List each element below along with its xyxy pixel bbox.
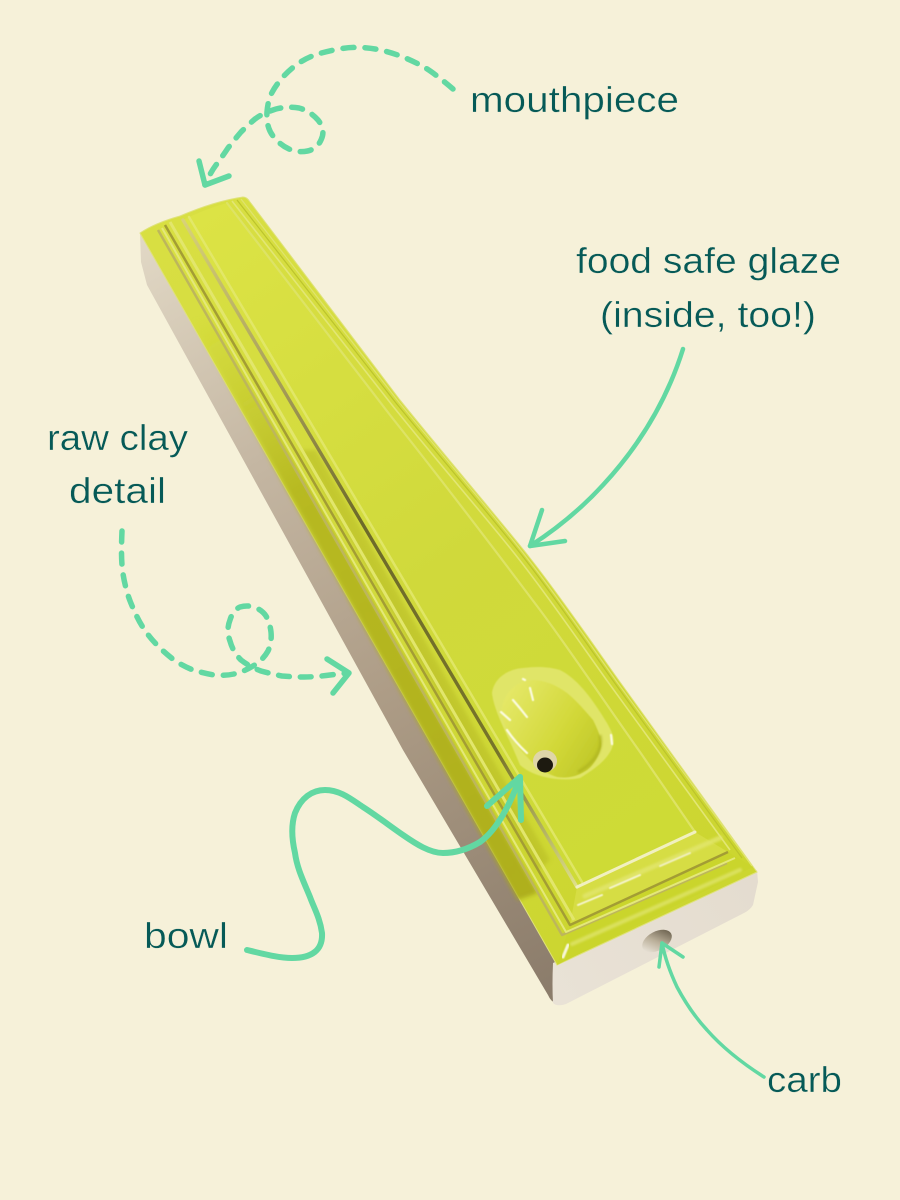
bowl rim bbox=[492, 667, 614, 779]
right ridge lines bbox=[232, 199, 752, 866]
arrow: food safe glaze bbox=[530, 349, 683, 546]
label: bowl: bowl bbox=[144, 915, 228, 956]
label: detail: detail bbox=[69, 470, 166, 511]
arrow: raw clay detail bbox=[122, 531, 349, 693]
bowl shadow bbox=[578, 735, 601, 772]
label: food safe glaze: food safe glaze bbox=[576, 240, 841, 281]
lower step highlights bbox=[563, 838, 740, 957]
raw clay front face bbox=[552, 870, 758, 1005]
glazed body bbox=[140, 197, 757, 965]
bowl glints bbox=[501, 679, 612, 753]
arrow: bowl bbox=[247, 777, 521, 958]
raised glazed panel bbox=[183, 203, 695, 887]
lower outer step band bbox=[557, 852, 753, 965]
label: mouthpiece: mouthpiece bbox=[470, 79, 679, 120]
label: inside, too: (inside, too!) bbox=[600, 294, 816, 335]
carb hole bbox=[638, 925, 676, 957]
arrow: mouthpiece bbox=[199, 47, 453, 185]
bowl cavity bbox=[502, 680, 601, 777]
label: raw clay: raw clay bbox=[47, 417, 189, 458]
panel edges bbox=[183, 203, 695, 887]
lower inner step band bbox=[570, 832, 728, 925]
product: ceramic pipe bbox=[140, 197, 758, 1005]
raw clay long side bbox=[140, 233, 560, 1003]
bowl hole dark centre bbox=[537, 758, 553, 772]
arrow: carb bbox=[659, 943, 764, 1077]
label: carb: carb bbox=[767, 1059, 842, 1100]
bowl hole bbox=[533, 750, 557, 772]
left ridge lines bbox=[158, 222, 735, 935]
olive shaded glaze band bbox=[190, 318, 538, 900]
bowl bbox=[492, 667, 614, 779]
shaded band beside panel bbox=[300, 450, 550, 870]
